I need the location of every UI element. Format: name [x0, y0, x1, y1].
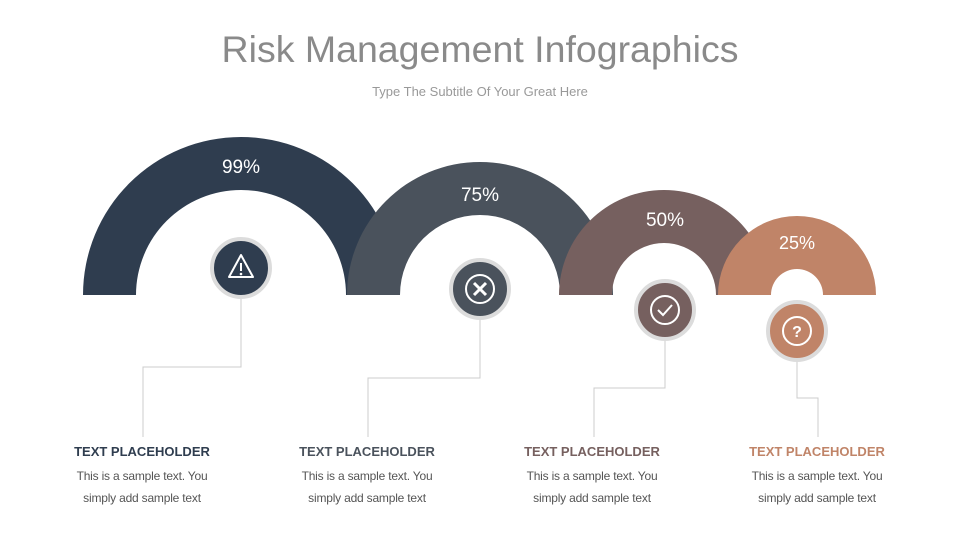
- text block 2: This is a sample text. You: [302, 469, 432, 483]
- text block 2: [299, 444, 435, 505]
- text block 1: TEXT PLACEHOLDER: [74, 444, 210, 459]
- arc 1: [83, 137, 399, 295]
- title: Risk Management Infographics: [222, 28, 738, 70]
- text block 1: simply add sample text: [83, 491, 201, 505]
- text block 1: This is a sample text. You: [77, 469, 207, 483]
- text block 2: TEXT PLACEHOLDER: [299, 444, 435, 459]
- arc 3: [559, 190, 769, 295]
- text block 3: [524, 444, 660, 505]
- arc 3: 50%: [646, 210, 684, 231]
- icon: cross: [451, 260, 509, 318]
- text block 2: simply add sample text: [308, 491, 426, 505]
- subtitle: Type The Subtitle Of Your Great Here: [372, 84, 588, 99]
- text block 4: [749, 444, 885, 505]
- text block 4: simply add sample text: [758, 491, 876, 505]
- icon: check: [636, 281, 694, 339]
- icon: question: [768, 302, 826, 360]
- text block 3: This is a sample text. You: [527, 469, 657, 483]
- text block 3: simply add sample text: [533, 491, 651, 505]
- text block 1: [74, 444, 210, 505]
- text block 4: This is a sample text. You: [752, 469, 882, 483]
- arc 4: 25%: [779, 233, 815, 253]
- icon: question: ?: [792, 324, 802, 341]
- arc 1: 99%: [222, 157, 260, 178]
- arc 2: [347, 162, 613, 295]
- arc 4: [718, 216, 876, 295]
- arc 2: 75%: [461, 185, 499, 206]
- text block 4: TEXT PLACEHOLDER: [749, 444, 885, 459]
- icon: warning: [212, 239, 270, 297]
- connectors: [143, 296, 818, 437]
- text block 3: TEXT PLACEHOLDER: [524, 444, 660, 459]
